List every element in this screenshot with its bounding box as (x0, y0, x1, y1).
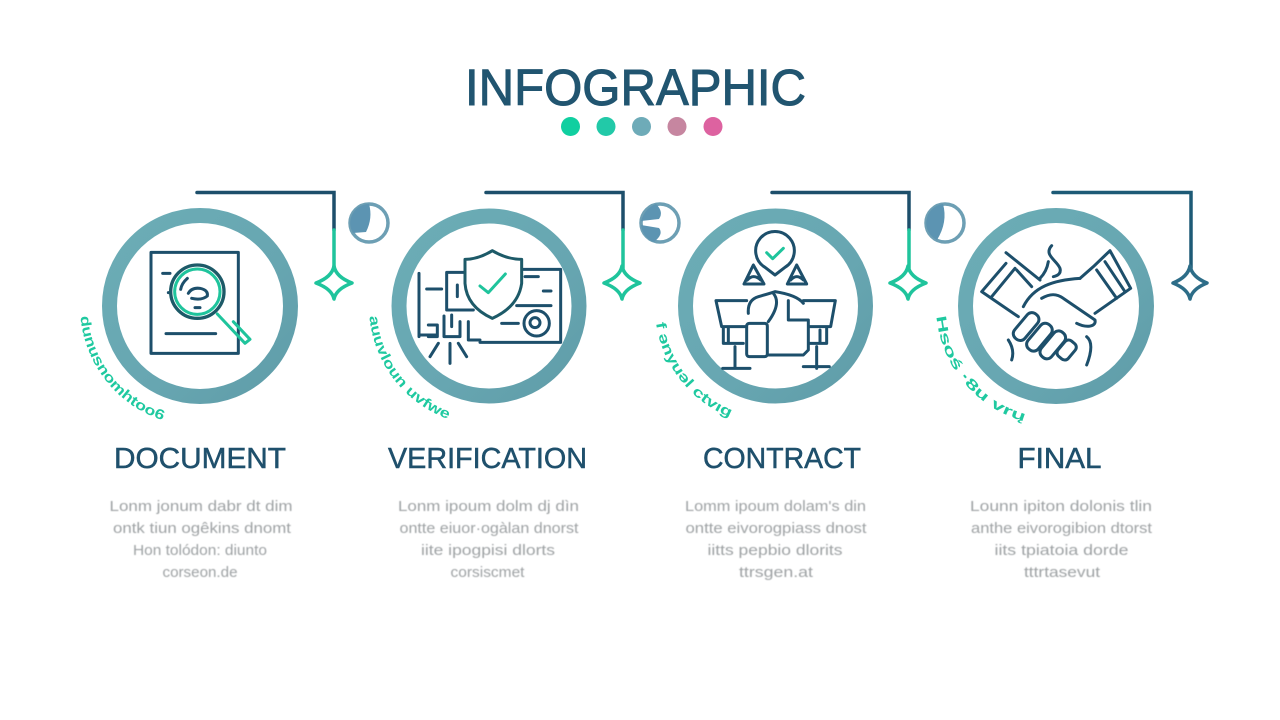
curved caption 2: auuvloun uvfwe (370, 316, 449, 418)
body text 1: corseon.de (162, 564, 238, 581)
half circle ornament 1 (350, 204, 388, 242)
curved caption 4: Hsoś ·8u vrų (936, 316, 1025, 424)
ring 3 (686, 216, 866, 396)
body text 3 (685, 498, 867, 581)
panel: final (936, 190, 1209, 581)
body text 2: corsiscmet (450, 564, 525, 581)
body text 4: Lounn ipiton dolonis tlin (970, 498, 1152, 515)
body text 3: ttrsgen.at (739, 564, 814, 581)
star marker 2 (604, 266, 640, 299)
decorative colour dots (561, 117, 722, 136)
heading: contract: CONTRACT (703, 443, 861, 475)
heading: document: DOCUMENT (114, 443, 286, 475)
body text 3: Lomm ipoum dolam's din (685, 498, 866, 515)
curved caption 1: dunusnomhtoo6 (80, 316, 164, 420)
star marker 1 (316, 266, 352, 299)
body text 4: anthe eivorogibion dtorst (971, 520, 1153, 537)
title: INFOGRAPHIC (465, 59, 806, 116)
icon: document with magnifier (151, 252, 250, 353)
connector line 3 (772, 192, 909, 268)
icon: agreement with scales (716, 231, 835, 368)
heading: verification: VERIFICATION (388, 443, 587, 475)
body text 2 (398, 498, 579, 581)
panel: document (80, 190, 390, 581)
icon: shield and card (419, 251, 561, 363)
connector line 2 (486, 192, 623, 268)
body text 2: Lonm ipoum dolm dj dìn (398, 498, 579, 515)
body text 4: tttrtasevut (1024, 564, 1101, 581)
star marker 3 (890, 266, 926, 299)
connector line 4 (1053, 192, 1191, 268)
icon: handshake (982, 246, 1131, 365)
half circle ornament 3 (926, 204, 964, 242)
panel: contract (656, 190, 966, 581)
body text 1: Lonm jonum dabr dt dim (110, 498, 292, 515)
star marker 4 (1173, 266, 1207, 299)
ring 2 (399, 216, 579, 396)
body text 1: ontk tiun ogêkins dnomt (113, 520, 292, 537)
body text 4 (970, 498, 1153, 581)
panel: verification (370, 190, 681, 581)
body text 4: iits tpiatoia dorde (994, 542, 1128, 559)
body text 2: ontte eiuor·ogàlan dnorst (400, 520, 579, 537)
ring 1 (110, 216, 290, 396)
ring 4 (966, 216, 1146, 396)
curved caption 3: f ənyuəl ctvıg (656, 322, 732, 418)
heading: final: FINAL (1018, 443, 1102, 475)
body text 3: iitts pepbio dlorits (708, 542, 842, 559)
connector line 1 (197, 192, 334, 268)
body text 1 (110, 498, 292, 581)
body text 2: iite ipogpisi dlorts (421, 542, 555, 559)
body text 1: Hon tolódon: diunto (133, 542, 267, 559)
body text 3: ontte eivorogpiass dnost (686, 520, 867, 537)
half circle ornament 2 (641, 204, 679, 242)
